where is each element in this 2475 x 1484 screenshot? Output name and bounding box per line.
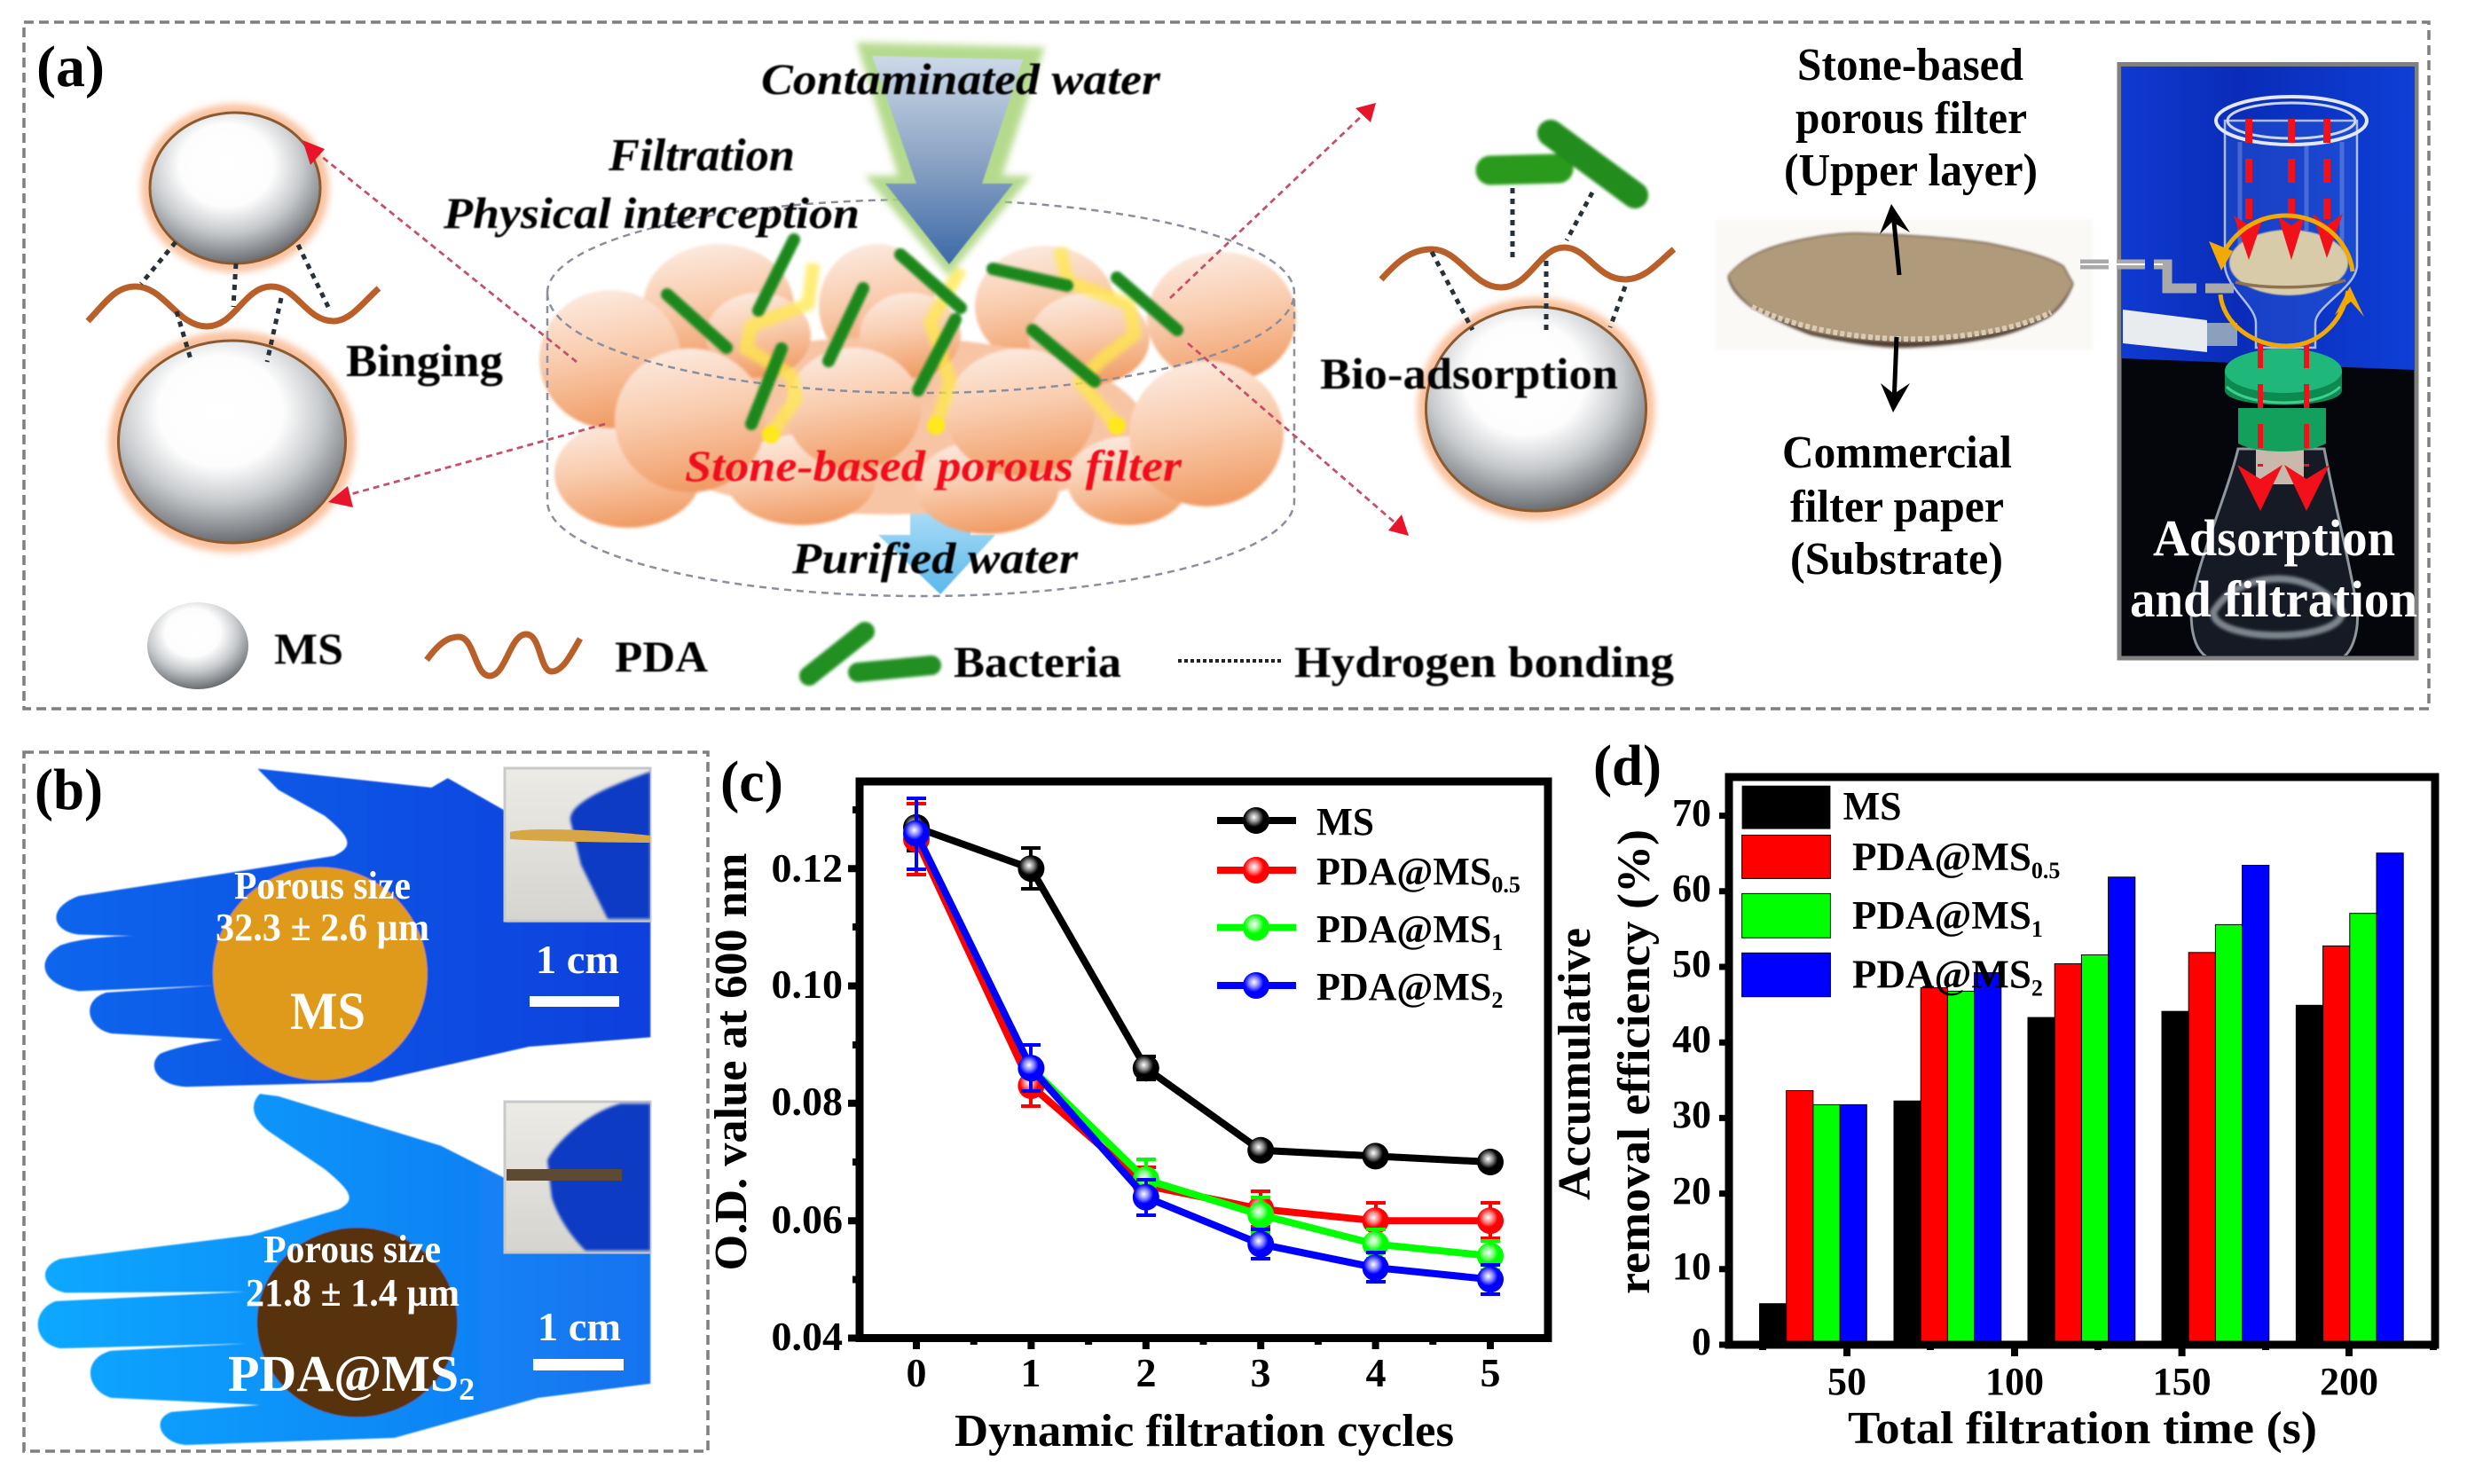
x tick labels: 2 <box>1135 1350 1157 1395</box>
photo: filter disc <box>1715 219 2093 350</box>
left particle pair with PDA binding <box>88 104 379 553</box>
x tick labels: 3 <box>1251 1350 1270 1395</box>
label: stone-based porous filter upper layer: porous filter <box>1795 93 2027 144</box>
sphere: upper MS particle <box>141 104 329 272</box>
legend: line chart: 1 <box>1491 930 1503 955</box>
glass funnel <box>2225 121 2357 348</box>
side tube <box>2123 310 2207 352</box>
legend: PDA: PDA <box>615 632 708 681</box>
y tick labels: 30 <box>1672 1093 1711 1136</box>
connector: disc to photo <box>2080 264 2234 288</box>
scale bar: 1 cm <box>530 937 619 1007</box>
bacteria on filter <box>667 239 1177 424</box>
x tick labels: 200 <box>2320 1360 2378 1403</box>
series: PDA@MS1 <box>903 798 1504 1270</box>
photo: filtration apparatus <box>2119 64 2417 658</box>
scale bar: 1 cm: 1 cm <box>536 937 619 982</box>
x tick labels: 1 <box>1020 1350 1041 1395</box>
axes frame and ticks <box>848 781 1548 1349</box>
label: purified water: Purified water <box>791 533 1079 583</box>
y tick labels: 70 <box>1672 791 1711 835</box>
y axis title: O.D. value at 600 nm <box>706 853 757 1270</box>
y axis title: Accumulative <box>1550 928 1600 1200</box>
inset: MS thickness <box>505 768 650 921</box>
y tick labels: 0 <box>1692 1320 1711 1363</box>
arrow: contaminated water <box>865 49 1036 266</box>
x tick labels: 150 <box>2153 1360 2212 1403</box>
label: PDA@MS2 sample: PDA@MS <box>228 1345 459 1402</box>
y tick labels: 20 <box>1672 1169 1711 1213</box>
PDA chain <box>88 287 379 326</box>
panel d: bar chart <box>1550 734 2435 1454</box>
legend: MS: MS <box>274 624 343 673</box>
scale bar: 1 cm <box>533 1304 624 1370</box>
legend row <box>147 602 1674 689</box>
y axis title: removal efficiency (%) <box>1609 829 1660 1294</box>
panel b: glove photos <box>24 752 708 1451</box>
label: MS sample: MS <box>290 982 365 1040</box>
legend: line chart: PDA@MS <box>1316 850 1491 893</box>
cylinder outline <box>547 200 1294 596</box>
legend: bar chart: PDA@MS <box>1852 953 2031 997</box>
x tick labels <box>1827 1360 2378 1403</box>
label: commercial filter paper substrate: filter paper <box>1790 482 2004 532</box>
bars: group 4 <box>2162 866 2269 1345</box>
scale bar: 1 cm: 1 cm <box>538 1304 621 1349</box>
label: MS porous size: 32.3 ± 2.6 µm <box>216 906 429 949</box>
y tick labels: 0.06 <box>772 1197 843 1242</box>
red flow arrows <box>2234 119 2343 511</box>
legend: line chart: PDA@MS <box>1316 907 1491 951</box>
label: adsorption and filtration: and filtration <box>2130 570 2417 628</box>
photo: MS on dark blue glove <box>44 768 650 1087</box>
legend: bar chart: PDA@MS <box>1852 893 2031 938</box>
label: MS porous size <box>216 864 429 949</box>
label: commercial filter paper substrate: (Substrate) <box>1790 534 2003 585</box>
label: PDA@MS2 sample: 2 <box>459 1371 475 1407</box>
bars: group 1 <box>1760 1091 1866 1345</box>
yellow flow paths <box>746 248 1135 435</box>
legend: bar chart: PDA@MS <box>1852 835 2031 879</box>
arrow: to substrate <box>1881 337 1910 412</box>
legend: bacteria: Bacteria <box>954 637 1121 687</box>
label: Binging: Binging <box>346 336 503 387</box>
hydrogen bonds <box>141 242 328 362</box>
dashed red zoom arrows <box>302 103 1409 536</box>
legend: bar chart: 1 <box>2031 916 2043 942</box>
axes frame and ticks <box>1719 777 2435 1356</box>
label: adsorption and filtration <box>2130 509 2417 628</box>
legend: PDA <box>427 632 708 681</box>
heading: (b): (b) <box>35 758 103 822</box>
x axis title: Total filtration time (s) <box>1848 1403 2317 1454</box>
y tick labels: 0.08 <box>772 1079 843 1124</box>
legend: MS <box>147 602 343 689</box>
bars <box>1760 853 2403 1345</box>
inset: PDA@MS2 thickness <box>505 1102 650 1252</box>
blue backdrop <box>2122 67 2414 370</box>
label: stone-based porous filter upper layer: (Upper layer) <box>1784 145 2038 196</box>
bars: group 5 <box>2296 853 2403 1345</box>
right particle with bacteria adsorption <box>1381 133 1674 520</box>
label: commercial filter paper substrate: Commercial <box>1782 428 2012 478</box>
x axis title: Dynamic filtration cycles <box>955 1406 1454 1457</box>
series: PDA@MS0.5 <box>903 804 1504 1238</box>
series: PDA@MS2 <box>903 798 1504 1294</box>
sphere: lower MS particle <box>108 331 355 553</box>
legend: line chart: 2 <box>1491 987 1503 1013</box>
photo: PDA@MS2 on light blue glove <box>38 1094 650 1445</box>
label: PDA@MS2 porous size: 21.8 ± 1.4 µm <box>246 1271 460 1315</box>
x tick labels: 4 <box>1366 1350 1386 1395</box>
label: stone-based porous filter upper layer: Stone-based <box>1797 40 2023 90</box>
y tick labels: 50 <box>1672 942 1711 985</box>
x tick labels: 0 <box>907 1350 926 1395</box>
orange circulation arrows <box>2209 216 2364 346</box>
y axis title <box>1550 829 1660 1294</box>
legend: bacteria <box>809 632 1121 687</box>
y tick labels: 0.04 <box>772 1314 843 1359</box>
PDA chain <box>1381 247 1674 287</box>
legend: line chart: PDA@MS <box>1316 965 1491 1009</box>
label: filtration: Filtration <box>608 130 795 181</box>
label: commercial filter paper substrate <box>1782 428 2012 585</box>
label: MS porous size: Porous size <box>234 864 411 907</box>
label: adsorption and filtration: Adsorption <box>2153 509 2395 567</box>
label: bio-adsorption: Bio-adsorption <box>1320 349 1618 398</box>
y tick labels: 40 <box>1672 1017 1711 1061</box>
y tick labels <box>772 845 843 1359</box>
bars: group 3 <box>2028 877 2135 1345</box>
series: MS <box>903 804 1504 1175</box>
blue arrow: purified water <box>878 483 995 594</box>
bright yellow flow ends <box>762 417 1126 444</box>
legend: bar chart: 2 <box>2031 976 2043 1001</box>
x tick labels <box>907 1350 1501 1395</box>
x tick labels: 50 <box>1827 1360 1866 1403</box>
bars: group 2 <box>1894 973 2001 1345</box>
legend: bar chart: 0.5 <box>2031 858 2060 883</box>
legend: line chart: 0.5 <box>1491 872 1520 898</box>
y tick labels <box>1672 791 1711 1363</box>
legend: hydrogen bonding: Hydrogen bonding <box>1294 637 1674 687</box>
legend: line chart: MS <box>1316 800 1374 844</box>
label: stone-based porous filter: Stone-based porous filter <box>685 441 1182 491</box>
y tick labels: 10 <box>1672 1245 1711 1288</box>
sphere: PDA-coated MS <box>1418 298 1655 520</box>
bacteria pair <box>1490 133 1635 195</box>
label: PDA@MS2 porous size: Porous size <box>263 1228 441 1271</box>
label: contaminated water: Contaminated water <box>761 54 1161 104</box>
legend: bar chart: MS <box>1843 784 1902 828</box>
label: PDA@MS2 porous size <box>246 1228 460 1315</box>
heading: (d): (d) <box>1593 734 1662 798</box>
label: physical interception: Physical interception <box>443 188 860 238</box>
heading: (c): (c) <box>720 750 783 814</box>
y tick labels: 60 <box>1672 867 1711 910</box>
flask <box>2191 449 2358 658</box>
y tick labels: 0.10 <box>772 962 843 1007</box>
filter inside funnel <box>2229 230 2348 295</box>
legend: bar chart <box>1742 784 2060 1001</box>
x tick labels: 100 <box>1985 1360 2044 1403</box>
panel c: line chart <box>706 750 1548 1457</box>
orange porous particles <box>539 244 1296 534</box>
label: stone-based porous filter upper layer <box>1784 40 2038 196</box>
dashed cylinder and filter particles <box>539 200 1296 596</box>
hydrogen bonds <box>1432 188 1625 332</box>
green stopper <box>2256 449 2304 484</box>
heading: (a): (a) <box>36 35 105 99</box>
x tick labels: 5 <box>1480 1350 1501 1395</box>
legend: line chart <box>1217 800 1520 1013</box>
y tick labels: 0.12 <box>772 845 843 891</box>
arrow: to upper layer <box>1880 204 1910 275</box>
